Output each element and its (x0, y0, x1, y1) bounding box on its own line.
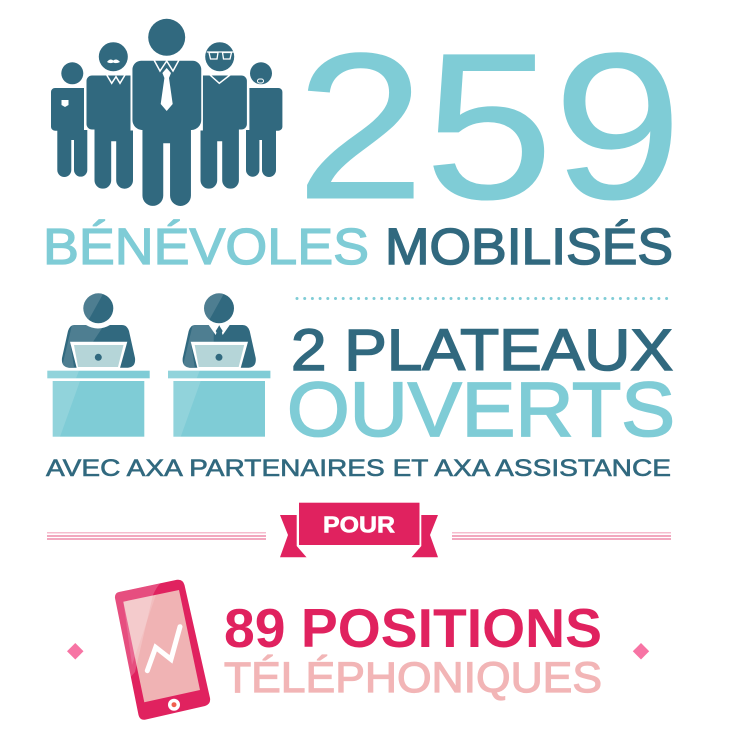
person second left with moustache (86, 42, 134, 189)
number 259: 259 (296, 11, 682, 243)
heading: ouverts: OUVERTS (287, 367, 675, 453)
icon: smartphone with chart (115, 580, 210, 720)
icon: first person at desk (47, 293, 150, 437)
person far left (51, 62, 87, 177)
person second right with glasses (200, 42, 247, 189)
icon: second person at desk (168, 293, 270, 437)
person far right (246, 62, 282, 177)
heading: bénévoles: BÉNÉVOLES (43, 218, 369, 275)
icon: group of five people (51, 19, 282, 207)
ribbon: pour (280, 503, 438, 557)
heading: 2 plateaux: 2 PLATEAUX (291, 318, 673, 383)
icon: left diamond (67, 643, 84, 660)
heading: 89 positions: 89 POSITIONS (224, 597, 602, 659)
ribbon label: POUR (323, 512, 395, 538)
subtitle: AVEC AXA PARTENAIRES ET AXA ASSISTANCE (46, 455, 671, 482)
icon: right diamond (633, 643, 649, 660)
heading: mobilisés: MOBILISÉS (385, 218, 673, 275)
heading: téléphoniques: TÉLÉPHONIQUES (224, 654, 602, 702)
person centre with tie (132, 19, 202, 207)
